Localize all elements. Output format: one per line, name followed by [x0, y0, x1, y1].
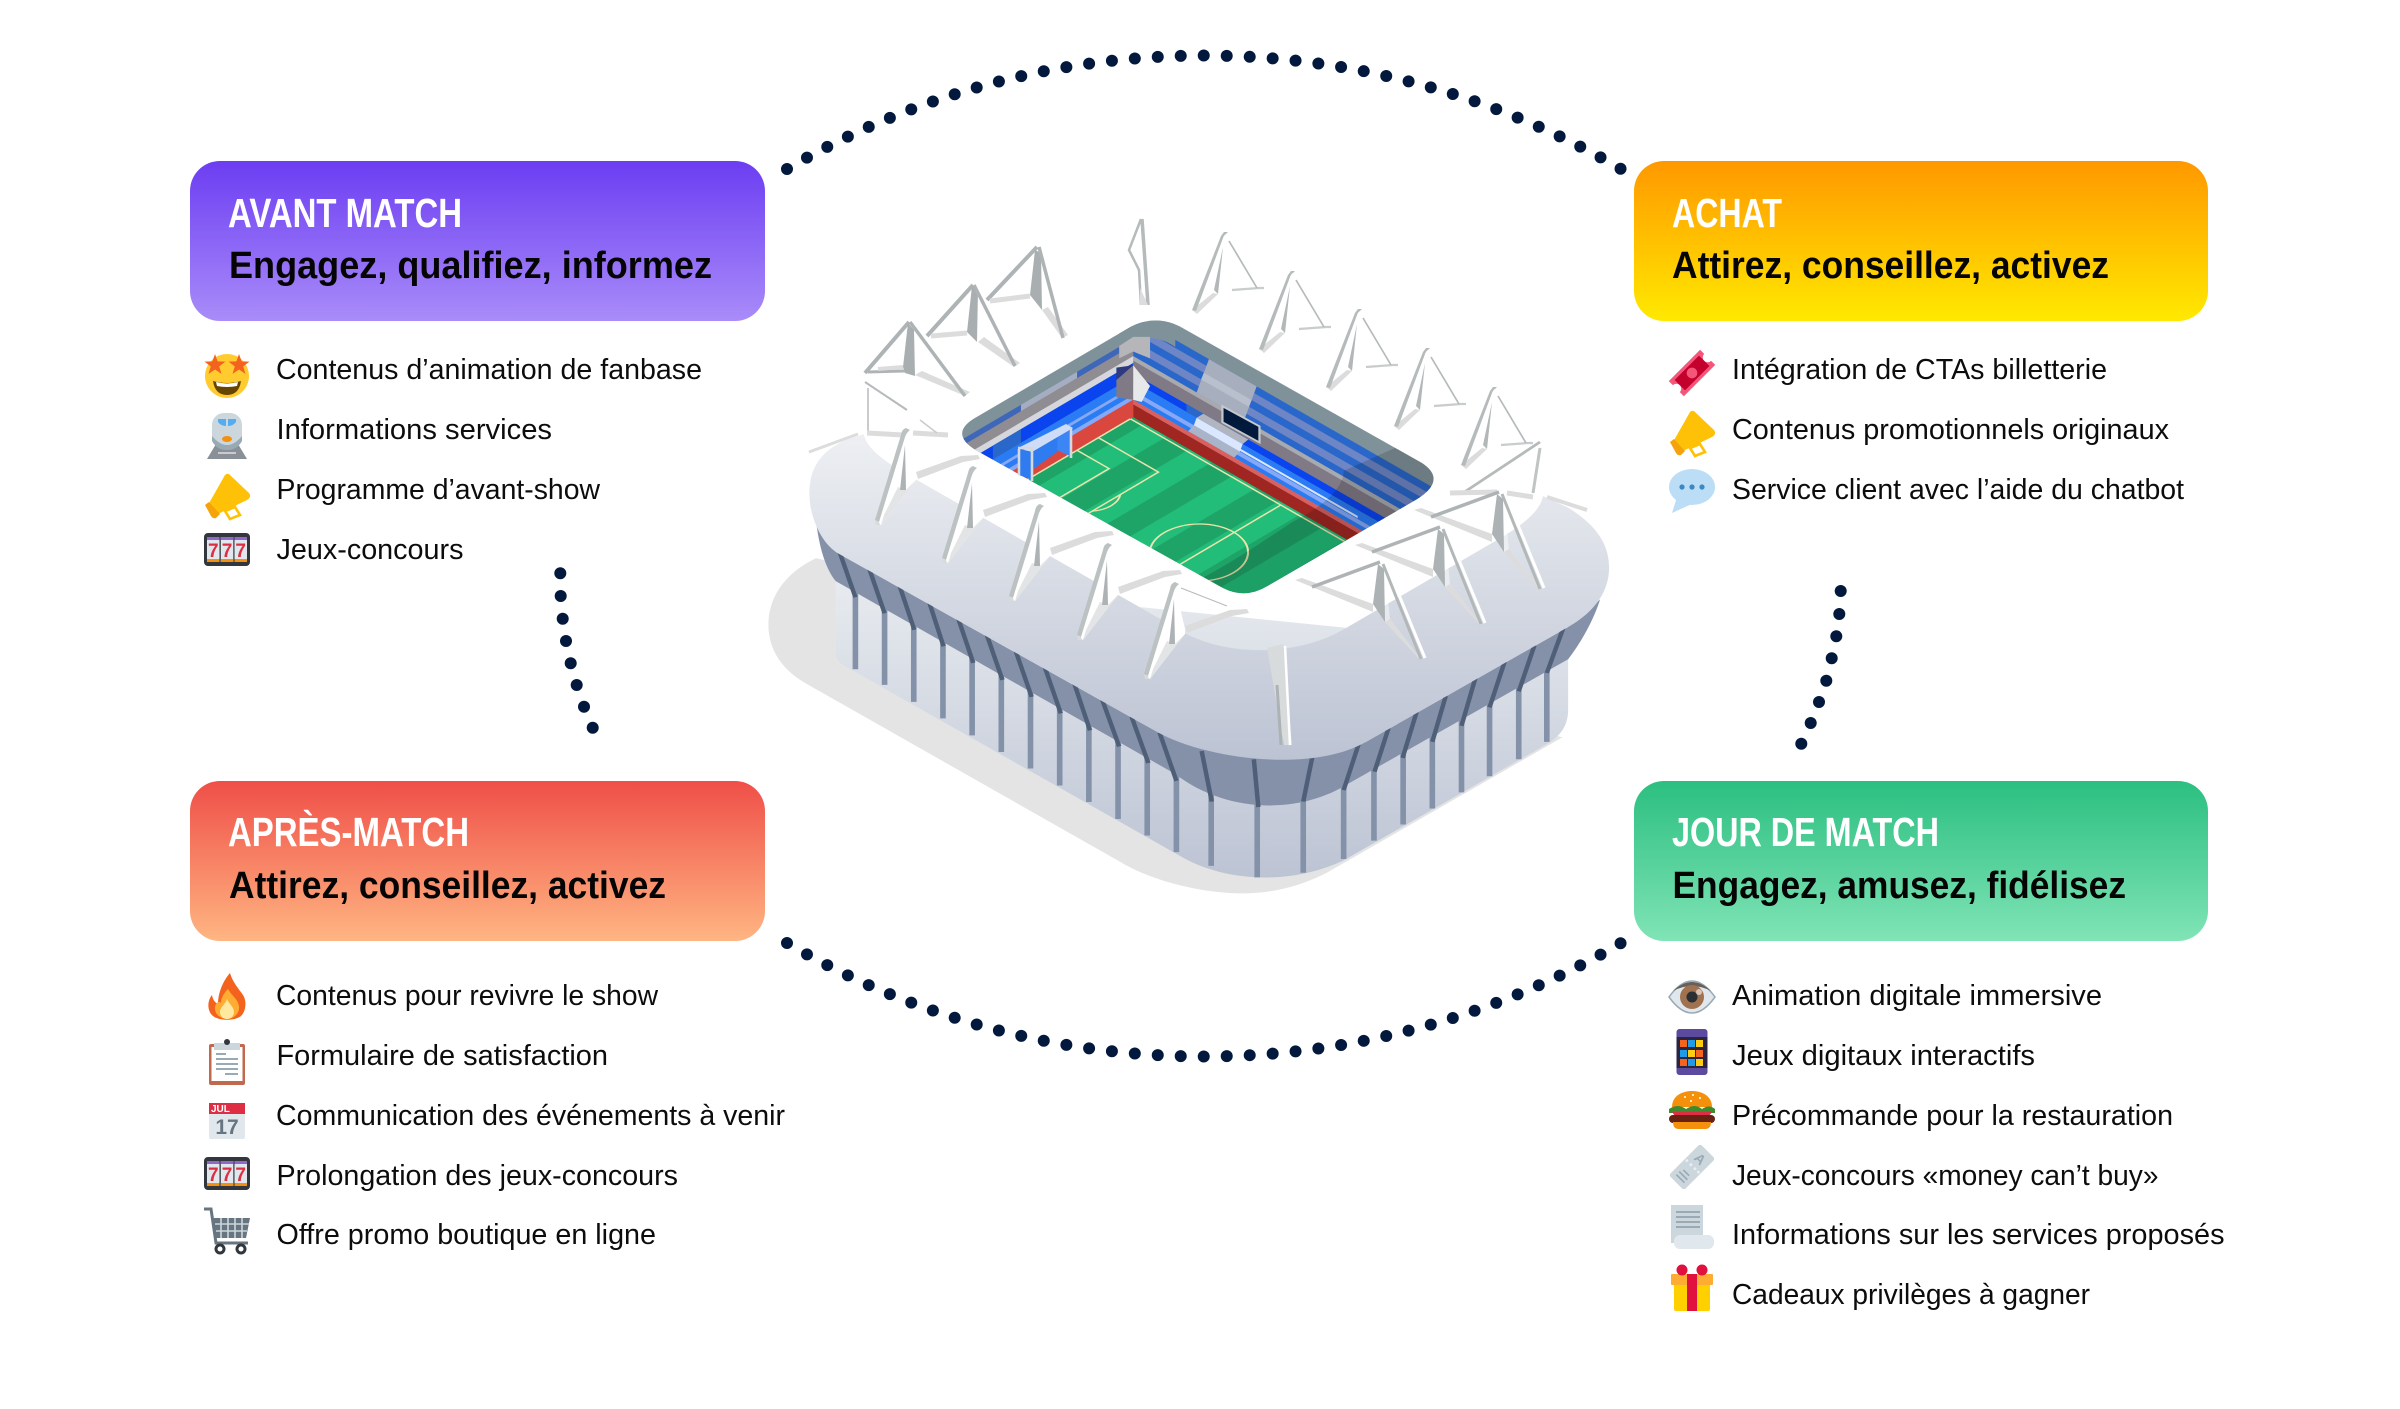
item text: Jeux-concours: [276, 534, 464, 566]
icon: slot machine: 7: [235, 1165, 246, 1186]
right stands: [1133, 322, 1432, 542]
item text: Jeux digitaux interactifs: [1732, 1040, 2035, 1072]
panel: jour de match: [1634, 781, 2224, 1311]
icon: train: [207, 413, 247, 459]
icon: megaphone: [205, 474, 250, 519]
item text: Offre promo boutique en ligne: [276, 1219, 656, 1251]
card header: [1634, 781, 2208, 941]
third top mast: [987, 247, 1068, 338]
card header: [1634, 161, 2208, 321]
icon: fire: [208, 973, 245, 1020]
icon: slot machine: [204, 1157, 250, 1190]
icon: slot machine: [204, 533, 250, 566]
subheading: Engagez, amusez, fidélisez: [1672, 865, 2126, 907]
left top mast: [865, 322, 970, 396]
icon: document: [1671, 1205, 1714, 1249]
item text: Contenus pour revivre le show: [276, 980, 659, 1012]
icon: slot machine: 7: [222, 1165, 232, 1186]
arc: dotted link bottom: [787, 943, 1621, 1056]
item text: Communication des événements à venir: [276, 1100, 785, 1132]
stand corner: [1120, 320, 1176, 347]
pitch: [1027, 417, 1348, 594]
icon: burger: [1669, 1091, 1715, 1129]
subheading: Attirez, conseillez, activez: [1672, 245, 2109, 287]
card header: [190, 781, 765, 941]
stadium bowl: [962, 320, 1434, 594]
item text: Informations services: [276, 414, 552, 446]
stadium illustration: [768, 219, 1609, 893]
panel: achat: [1634, 161, 2208, 513]
icon: gift: [1671, 1264, 1713, 1311]
item text: Contenus promotionnels originaux: [1732, 414, 2169, 446]
goal: [1018, 424, 1073, 481]
item text: Contenus d’animation de fanbase: [276, 354, 702, 386]
icon: megaphone: [1670, 411, 1715, 456]
front roof masts: [875, 428, 1544, 745]
item text: Prolongation des jeux-concours: [276, 1160, 678, 1192]
icon: slot machine: 7: [208, 1165, 219, 1186]
item text: Programme d’avant-show: [276, 474, 601, 506]
card header: [190, 161, 765, 321]
icon: chat bubble: [1669, 469, 1715, 513]
icon: grey ticket: A: [1691, 1150, 1709, 1168]
right side mast: [1450, 442, 1587, 510]
arc: dotted link right: [1795, 585, 1847, 750]
icon: slot machine: 7: [222, 541, 232, 562]
item text: Informations sur les services proposés: [1732, 1219, 2224, 1251]
item text: Précommande pour la restauration: [1732, 1100, 2173, 1132]
icon: calendar: 17: [215, 1116, 239, 1139]
panel: avant match: [190, 161, 765, 566]
subheading: Engagez, qualifiez, informez: [229, 245, 712, 287]
item text: Service client avec l’aide du chatbot: [1732, 474, 2184, 506]
heading: ACHAT: [1672, 190, 1782, 236]
icon: slot machine: 7: [208, 541, 219, 562]
arc: dotted link top: [787, 56, 1621, 169]
left stands: [964, 347, 1134, 480]
icon: phone games: [1676, 1029, 1708, 1075]
icon: calendar: JUL: [211, 1104, 230, 1115]
subheading: Attirez, conseillez, activez: [229, 865, 666, 907]
icon: ticket: [1669, 350, 1715, 396]
heading: JOUR DE MATCH: [1672, 809, 1939, 855]
left side mast: [809, 382, 948, 452]
ground shadow: [768, 558, 1563, 893]
item text: Jeux-concours «money can’t buy»: [1732, 1160, 2158, 1192]
panel: après-match: [190, 781, 785, 1253]
icon: slot machine: 7: [235, 541, 246, 562]
item text: Intégration de CTAs billetterie: [1732, 354, 2107, 386]
icon: cart: [204, 1209, 250, 1253]
item text: Formulaire de satisfaction: [276, 1040, 608, 1072]
stadium structure: [768, 306, 1609, 893]
icon: eye: [1669, 981, 1715, 1013]
icon: calendar: [209, 1103, 245, 1139]
roof shadow: [1204, 448, 1434, 594]
spire mast: [1129, 219, 1148, 305]
back roof masts: [1192, 232, 1533, 469]
second top mast: [927, 285, 1020, 367]
wall columns: [855, 577, 1547, 877]
item text: Cadeaux privilèges à gagner: [1732, 1279, 2090, 1311]
big screen: [1222, 406, 1259, 442]
icon: star struck: [204, 354, 250, 398]
icon: clipboard: [209, 1039, 245, 1085]
roof surface: [809, 434, 1609, 760]
heading: AVANT MATCH: [228, 190, 462, 236]
arc: dotted link left: [554, 567, 599, 734]
icon: grey ticket: [1669, 1144, 1715, 1190]
lower wall: [836, 577, 1568, 878]
facade dark ribs: [839, 549, 1564, 807]
roof facade band: [816, 521, 1600, 805]
item text: Animation digitale immersive: [1732, 980, 2102, 1012]
inner rim: [962, 320, 1434, 594]
heading: APRÈS-MATCH: [228, 809, 469, 855]
